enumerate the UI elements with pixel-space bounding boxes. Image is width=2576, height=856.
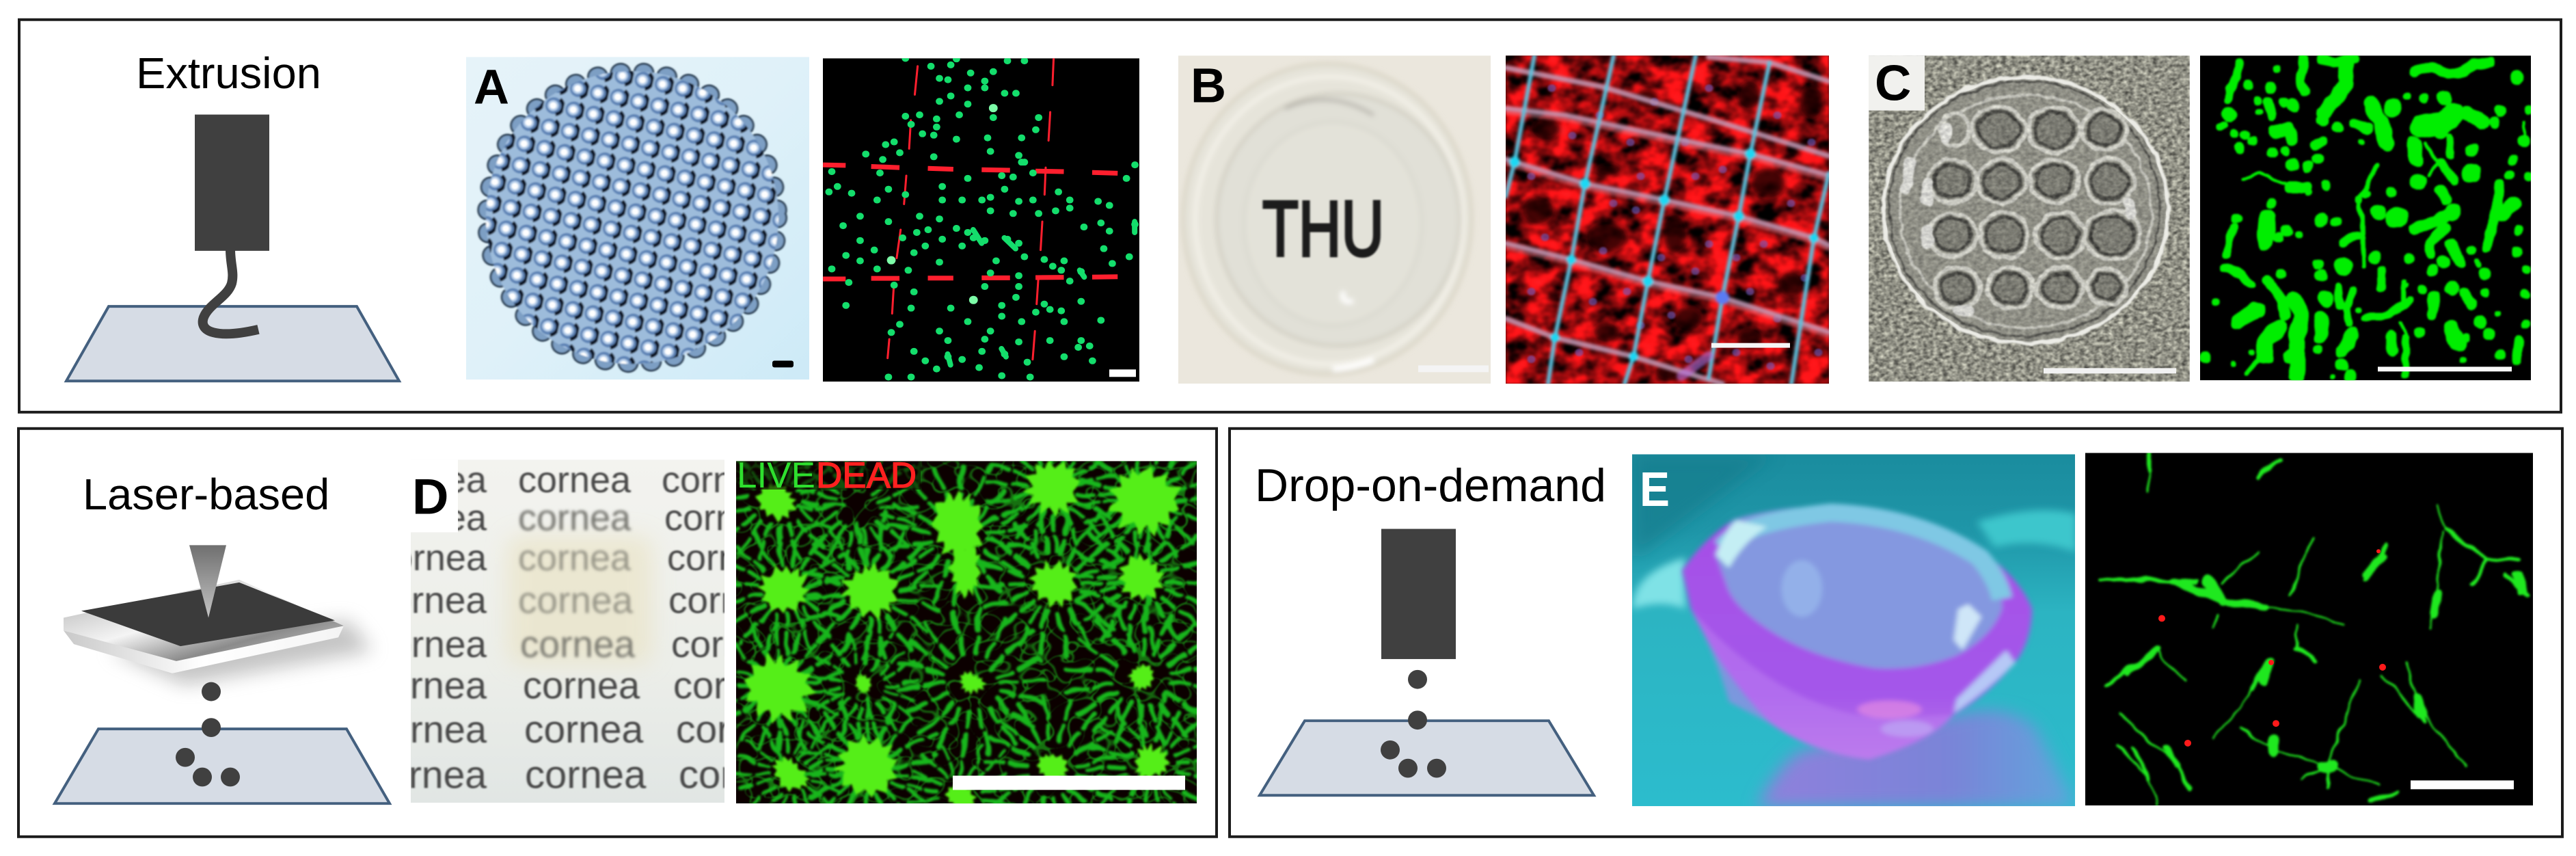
scale bar bbox=[2411, 780, 2514, 789]
repeated word "cornea" behind the construct: cornea bbox=[525, 753, 647, 797]
scale bar bbox=[2378, 366, 2512, 371]
icon: extrusion printer schematic bbox=[66, 115, 399, 381]
words seen through the construct: cornea bbox=[518, 498, 631, 538]
micrograph B: red cells on cyan fibre lattice bbox=[1506, 55, 1829, 384]
repeated word "cornea" behind the construct: cornea bbox=[668, 579, 784, 621]
repeated word "cornea" behind the construct: cornea bbox=[676, 708, 796, 751]
heading: Extrusion: Extrusion bbox=[136, 48, 321, 98]
icon: laser printer schematic bbox=[55, 545, 390, 803]
repeated word "cornea" behind the construct: cornea bbox=[662, 459, 774, 500]
repeated word "cornea" behind the construct bbox=[368, 459, 800, 797]
words seen through the construct bbox=[518, 498, 636, 665]
panel: laser-based bbox=[18, 388, 1238, 856]
repeated word "cornea" behind the construct: cornea bbox=[370, 708, 487, 751]
repeated word "cornea" behind the construct: cornea bbox=[671, 623, 787, 665]
micrograph C: green cell aggregates bbox=[2200, 55, 2531, 380]
repeated word "cornea" behind the construct: cornea bbox=[673, 665, 790, 706]
repeated word "cornea" behind the construct: cornea bbox=[523, 665, 640, 706]
repeated word "cornea" behind the construct: cornea bbox=[368, 754, 487, 797]
dead cells bbox=[2158, 549, 2386, 747]
photo E: printed purple cornea cup bbox=[1632, 454, 2075, 807]
scale bar bbox=[953, 776, 1185, 790]
photo A: printed lattice disc bbox=[466, 57, 809, 380]
scale bar bbox=[2044, 368, 2176, 373]
label D: D bbox=[412, 468, 448, 525]
repeated word "cornea" behind the construct: cornea bbox=[372, 623, 487, 665]
repeated word "cornea" behind the construct: cornea bbox=[372, 579, 487, 621]
repeated word "cornea" behind the construct: cornea bbox=[370, 665, 487, 706]
words seen through the construct: cornea bbox=[518, 579, 634, 621]
label C bbox=[1869, 55, 1925, 111]
hydrogel construct patch bbox=[507, 535, 652, 665]
repeated word "cornea" behind the construct: cornea bbox=[524, 708, 644, 751]
label D bbox=[411, 459, 458, 533]
scale bar bbox=[1109, 369, 1136, 377]
label A: A bbox=[474, 60, 509, 115]
scale bar bbox=[1711, 343, 1790, 348]
panel: drop-on-demand bbox=[1230, 429, 2562, 837]
label C: C bbox=[1875, 55, 1911, 111]
repeated word "cornea" behind the construct: cornea bbox=[374, 498, 487, 538]
scale bar A bbox=[772, 360, 794, 367]
photo C: phase contrast construct bbox=[1869, 55, 2190, 382]
panel: extrusion bbox=[19, 20, 2561, 412]
heading: Laser-based: Laser-based bbox=[83, 469, 329, 519]
repeated word "cornea" behind the construct: cornea bbox=[374, 537, 487, 578]
printed text THU: THU bbox=[1262, 185, 1384, 273]
micrograph E: sparse green cells with red dead cells bbox=[2085, 453, 2533, 805]
micrograph D: live/dead stained cell clusters bbox=[736, 455, 1197, 804]
caption LIVE/DEAD: LIVE bbox=[737, 455, 815, 496]
repeated word "cornea" behind the construct: cornea bbox=[664, 498, 777, 538]
caption LIVE/DEAD: DEAD bbox=[816, 455, 917, 496]
caption LIVE/DEAD bbox=[737, 455, 917, 496]
heading: Drop-on-demand: Drop-on-demand bbox=[1255, 460, 1606, 511]
repeated word "cornea" behind the construct: cornea bbox=[518, 459, 631, 500]
photo B: dish with printed THU bbox=[1178, 56, 1491, 384]
label B: B bbox=[1191, 59, 1226, 113]
scale bar bbox=[1418, 365, 1489, 372]
label E: E bbox=[1640, 462, 1670, 517]
icon: drop-on-demand schematic bbox=[1260, 529, 1594, 795]
repeated word "cornea" behind the construct: cornea bbox=[679, 753, 800, 797]
words seen through the construct: cornea bbox=[520, 623, 636, 665]
photo D: transparent printed cornea over text bbox=[368, 459, 800, 803]
repeated word "cornea" behind the construct: cornea bbox=[374, 459, 487, 500]
words seen through the construct: cornea bbox=[518, 537, 631, 578]
micrograph A: green cells with red dashed lattice bbox=[823, 58, 1139, 382]
repeated word "cornea" behind the construct: cornea bbox=[667, 537, 780, 578]
